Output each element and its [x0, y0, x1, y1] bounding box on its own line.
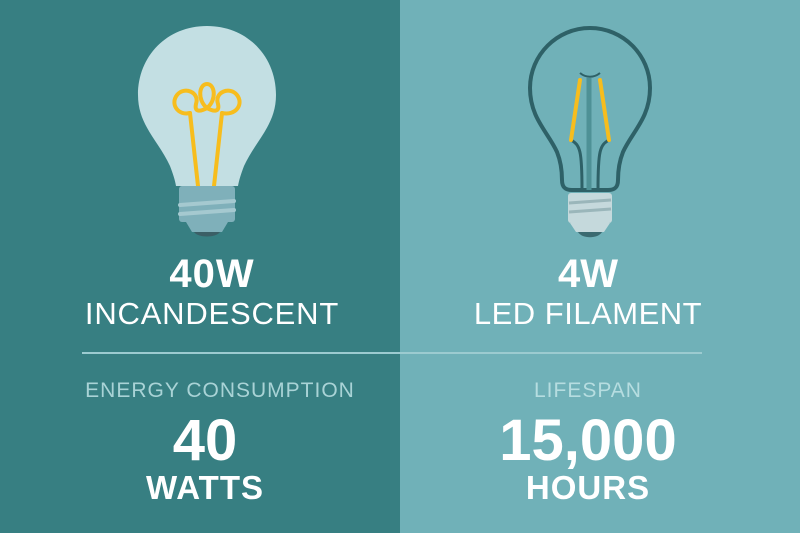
panel: incandescent: [0, 0, 400, 533]
stat: 40 watts: [146, 408, 264, 506]
heading: 4W LED filament: [474, 252, 702, 331]
heading: 40W incandescent: INCANDESCENT: [85, 296, 339, 331]
stat: 15,000 hours: HOURS: [526, 469, 650, 506]
stat: 15,000 hours: [499, 408, 677, 506]
text: energy consumption: ENERGY CONSUMPTION: [85, 379, 355, 402]
heading: 40W incandescent: [85, 252, 339, 331]
text: lifespan: LIFESPAN: [534, 379, 642, 402]
divider: [82, 352, 702, 354]
heading: 4W LED filament: LED FILAMENT: [474, 296, 702, 331]
stat: 15,000 hours: 15,000: [499, 408, 677, 473]
stat: 40 watts: 40: [173, 408, 237, 473]
panel: LED: [400, 0, 800, 533]
heading: 4W LED filament: 4W: [558, 252, 618, 296]
heading: 40W incandescent: 40W: [169, 252, 255, 296]
stat: 40 watts: WATTS: [146, 469, 264, 506]
